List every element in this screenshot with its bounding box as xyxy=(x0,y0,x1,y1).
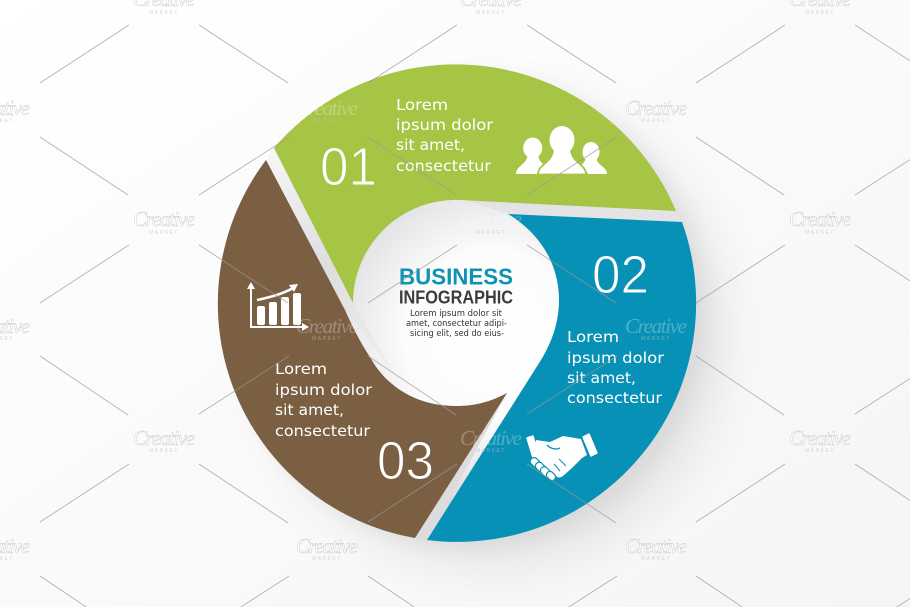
text block 01: consectetur xyxy=(396,157,492,175)
number 02: 02 xyxy=(592,245,649,305)
centre disc background xyxy=(220,67,692,539)
text block 01: ipsum dolor xyxy=(396,116,494,134)
gaps between segments xyxy=(266,148,682,541)
text block 03: ipsum dolor xyxy=(275,381,373,399)
watermarks: Creative xyxy=(460,207,522,231)
number 01: 01 xyxy=(320,137,377,197)
icon: bar chart xyxy=(247,282,309,331)
heading: business: BUSINESS xyxy=(399,264,513,290)
centre description: sicing elit, sed do eius- xyxy=(410,329,504,339)
text block 01: sit amet, xyxy=(396,136,465,154)
text block 01 xyxy=(396,96,494,175)
watermarks: Creative xyxy=(460,426,522,450)
watermarks: MARKET xyxy=(476,448,506,454)
watermarks: Creative xyxy=(296,96,358,120)
watermarks: MARKET xyxy=(312,336,342,342)
centre title xyxy=(399,264,513,339)
text block 02: ipsum dolor xyxy=(567,349,665,367)
watermarks: MARKET xyxy=(641,336,671,342)
text block 02 xyxy=(567,328,665,407)
panel: segment 03 brown xyxy=(218,160,507,538)
watermarks: Creative xyxy=(625,96,687,120)
watermarks: Creative xyxy=(133,207,195,231)
text block 02: consectetur xyxy=(567,389,663,407)
watermarks: Creative xyxy=(133,426,195,450)
text block 02: sit amet, xyxy=(567,369,636,387)
watermarks: Creative xyxy=(296,314,358,338)
watermarks: Creative xyxy=(789,426,851,450)
watermarks: MARKET xyxy=(476,10,506,16)
panel: segment 02 blue xyxy=(427,214,696,542)
text block 03: Lorem xyxy=(275,360,327,378)
text block 03 xyxy=(275,360,373,440)
panel: segment 01 green xyxy=(274,64,676,303)
watermarks: MARKET xyxy=(641,118,671,124)
text block 03: sit amet, xyxy=(275,401,344,419)
watermarks: MARKET xyxy=(149,10,179,16)
text block 01: Lorem xyxy=(396,96,448,114)
text block 03: consectetur xyxy=(275,422,371,440)
watermarks: MARKET xyxy=(149,448,179,454)
watermarks: MARKET xyxy=(805,230,835,236)
centre description xyxy=(406,309,507,339)
watermarks: MARKET xyxy=(805,10,835,16)
watermarks: MARKET xyxy=(641,556,671,562)
watermarks: MARKET xyxy=(149,230,179,236)
icon: people xyxy=(516,126,607,174)
watermarks: Creative xyxy=(789,207,851,231)
watermarks: MARKET xyxy=(312,118,342,124)
text block 02: Lorem xyxy=(567,328,619,346)
icon: handshake xyxy=(527,434,597,482)
watermarks: Creative xyxy=(625,314,687,338)
number 03: 03 xyxy=(377,431,434,491)
long soft shadow of the ring xyxy=(234,76,726,566)
centre description: Lorem ipsum dolor sit xyxy=(410,309,503,319)
watermarks: MARKET xyxy=(805,448,835,454)
centre description: amet, consectetur adipi- xyxy=(406,319,507,329)
heading: infographic: INFOGRAPHIC xyxy=(399,288,513,308)
watermarks: Creative xyxy=(296,534,358,558)
watermarks: Creative xyxy=(625,534,687,558)
watermarks: MARKET xyxy=(312,556,342,562)
watermarks: MARKET xyxy=(476,230,506,236)
